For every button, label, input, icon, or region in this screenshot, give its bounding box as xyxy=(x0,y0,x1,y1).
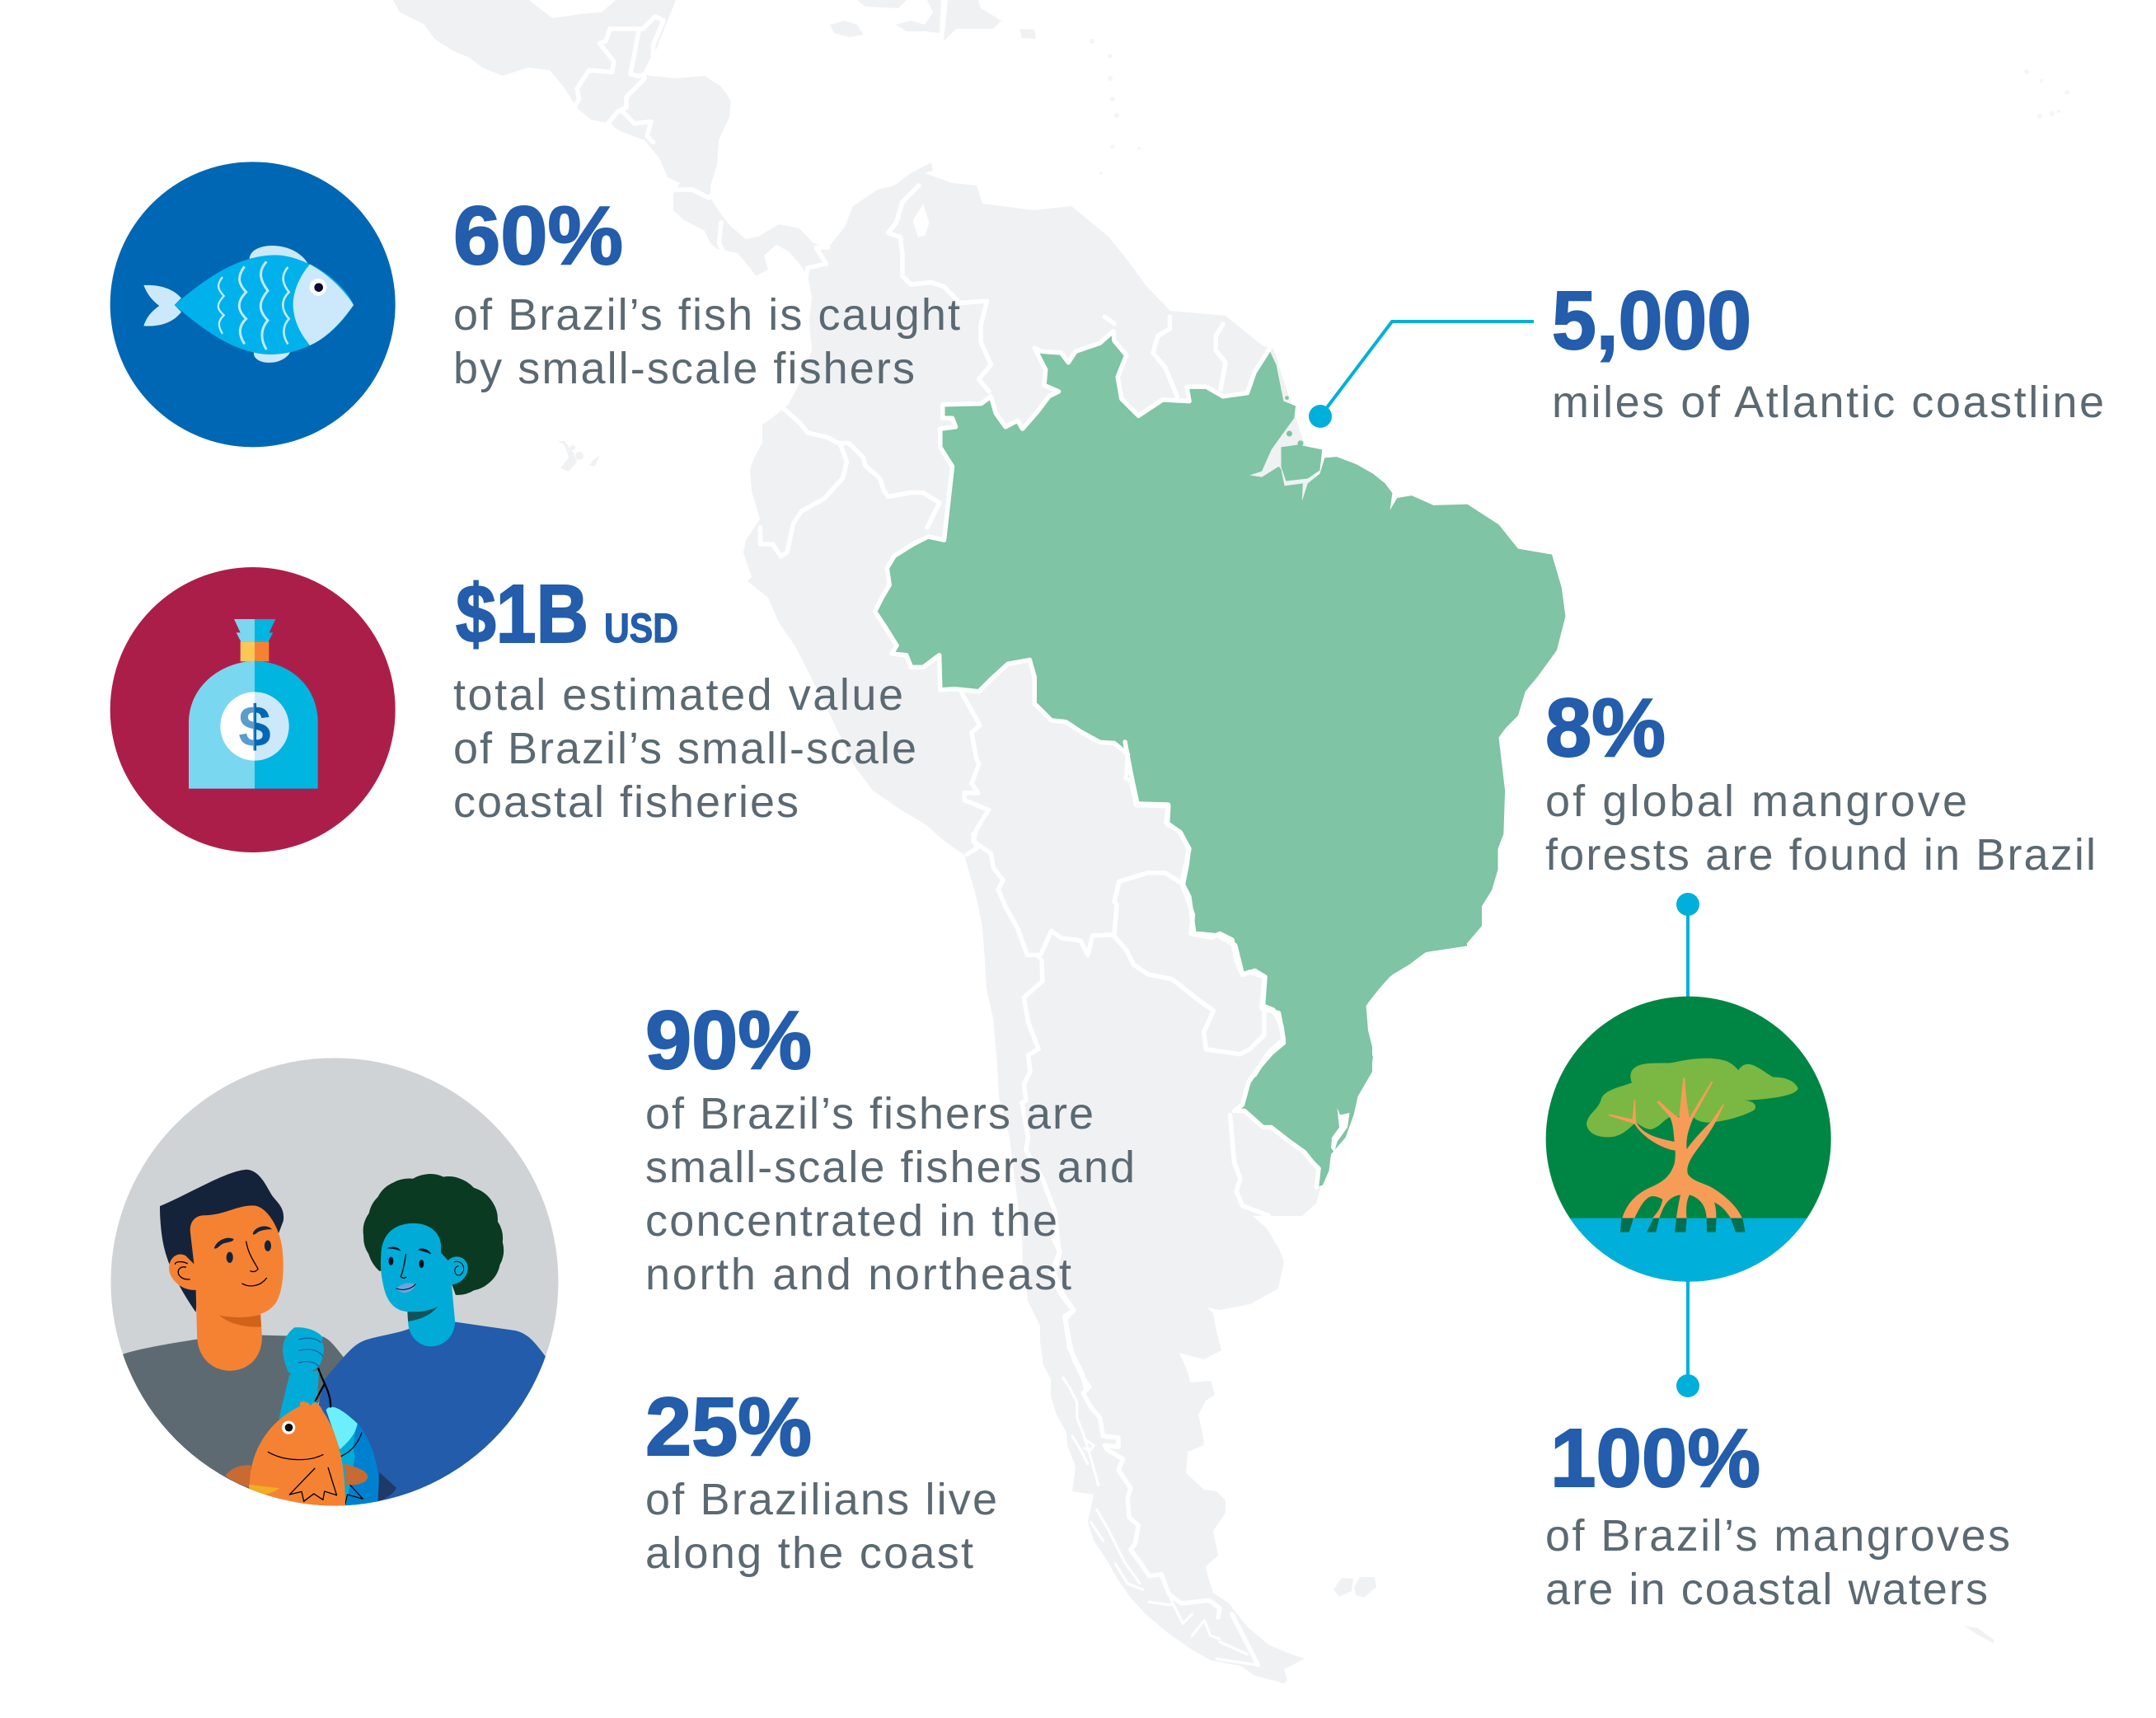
icon: fish in blue circle xyxy=(110,162,396,447)
stat: 5,000 miles: miles of Atlantic coastline xyxy=(1552,378,2104,427)
stat: 5,000 miles: 5,000 xyxy=(1552,275,1751,367)
orange fish xyxy=(226,1465,251,1488)
stat: 90%: of Brazil’s fishers are xyxy=(645,1089,1094,1138)
stat: $1B USD: total estimated value xyxy=(453,670,903,720)
stat: 25%: along the coast xyxy=(645,1528,973,1578)
connector: coastline callout xyxy=(1309,322,1534,428)
stat: 60%: by small-scale fishers xyxy=(453,344,915,393)
connector: mangrove stats xyxy=(1676,893,1699,1397)
stat: 25%: of Brazilians live xyxy=(645,1475,997,1524)
stat: 8%: 8% xyxy=(1545,682,1666,774)
arm and hand with fish string xyxy=(279,1370,319,1419)
stat: $1B USD: coastal fisheries xyxy=(453,777,799,827)
stat: 100% xyxy=(1545,1412,2010,1614)
background map of Latin America xyxy=(393,0,2069,1683)
stat: 90%: concentrated in the xyxy=(645,1196,1057,1246)
stat: 60% xyxy=(453,190,960,393)
woman's afro hair xyxy=(363,1174,504,1295)
woman's blue shirt xyxy=(294,1322,562,1508)
stat: 100%: are in coastal waters xyxy=(1545,1565,1988,1614)
woman's head and neck xyxy=(381,1223,468,1346)
blue fish xyxy=(340,1410,379,1505)
stat: 8%: forests are found in Brazil xyxy=(1545,830,2096,880)
stat: 60%: 60% xyxy=(453,190,623,282)
small islands xyxy=(1090,39,2069,175)
stat: 8% xyxy=(1545,682,2096,880)
man's head and neck xyxy=(169,1205,284,1371)
stat: $1B USD: of Brazil’s small-scale xyxy=(453,724,916,773)
stat: 90%: small-scale fishers and xyxy=(645,1143,1135,1192)
icon: money bag in crimson circle xyxy=(110,567,396,852)
stat: 100%: 100% xyxy=(1550,1412,1760,1504)
stat: 100%: of Brazil’s mangroves xyxy=(1545,1511,2010,1561)
icon: money bag in crimson circle: $ xyxy=(238,693,271,758)
stat: 90%: north and northeast xyxy=(645,1250,1071,1299)
stat: $1B USD xyxy=(453,568,916,827)
stat: 8%: of global mangrove xyxy=(1545,777,1967,826)
map: Brazil highlighted in green xyxy=(875,331,1565,1187)
stat: $1B USD: USD xyxy=(604,605,678,651)
stat: 25%: 25% xyxy=(645,1381,812,1473)
stat: 90%: 90% xyxy=(645,994,812,1087)
stat: $1B USD: $1B xyxy=(456,568,588,660)
stat: 90% xyxy=(645,994,1135,1299)
icon: mangrove tree in green circle xyxy=(1546,996,1831,1282)
stat: 5,000 miles xyxy=(1552,275,2104,427)
man's hair xyxy=(160,1170,284,1312)
stat: 60%: of Brazil’s fish is caught xyxy=(453,290,960,340)
grey shirt xyxy=(117,1335,344,1508)
illustration: two fishers holding fish xyxy=(110,1058,562,1508)
stat: 25% xyxy=(645,1381,997,1578)
